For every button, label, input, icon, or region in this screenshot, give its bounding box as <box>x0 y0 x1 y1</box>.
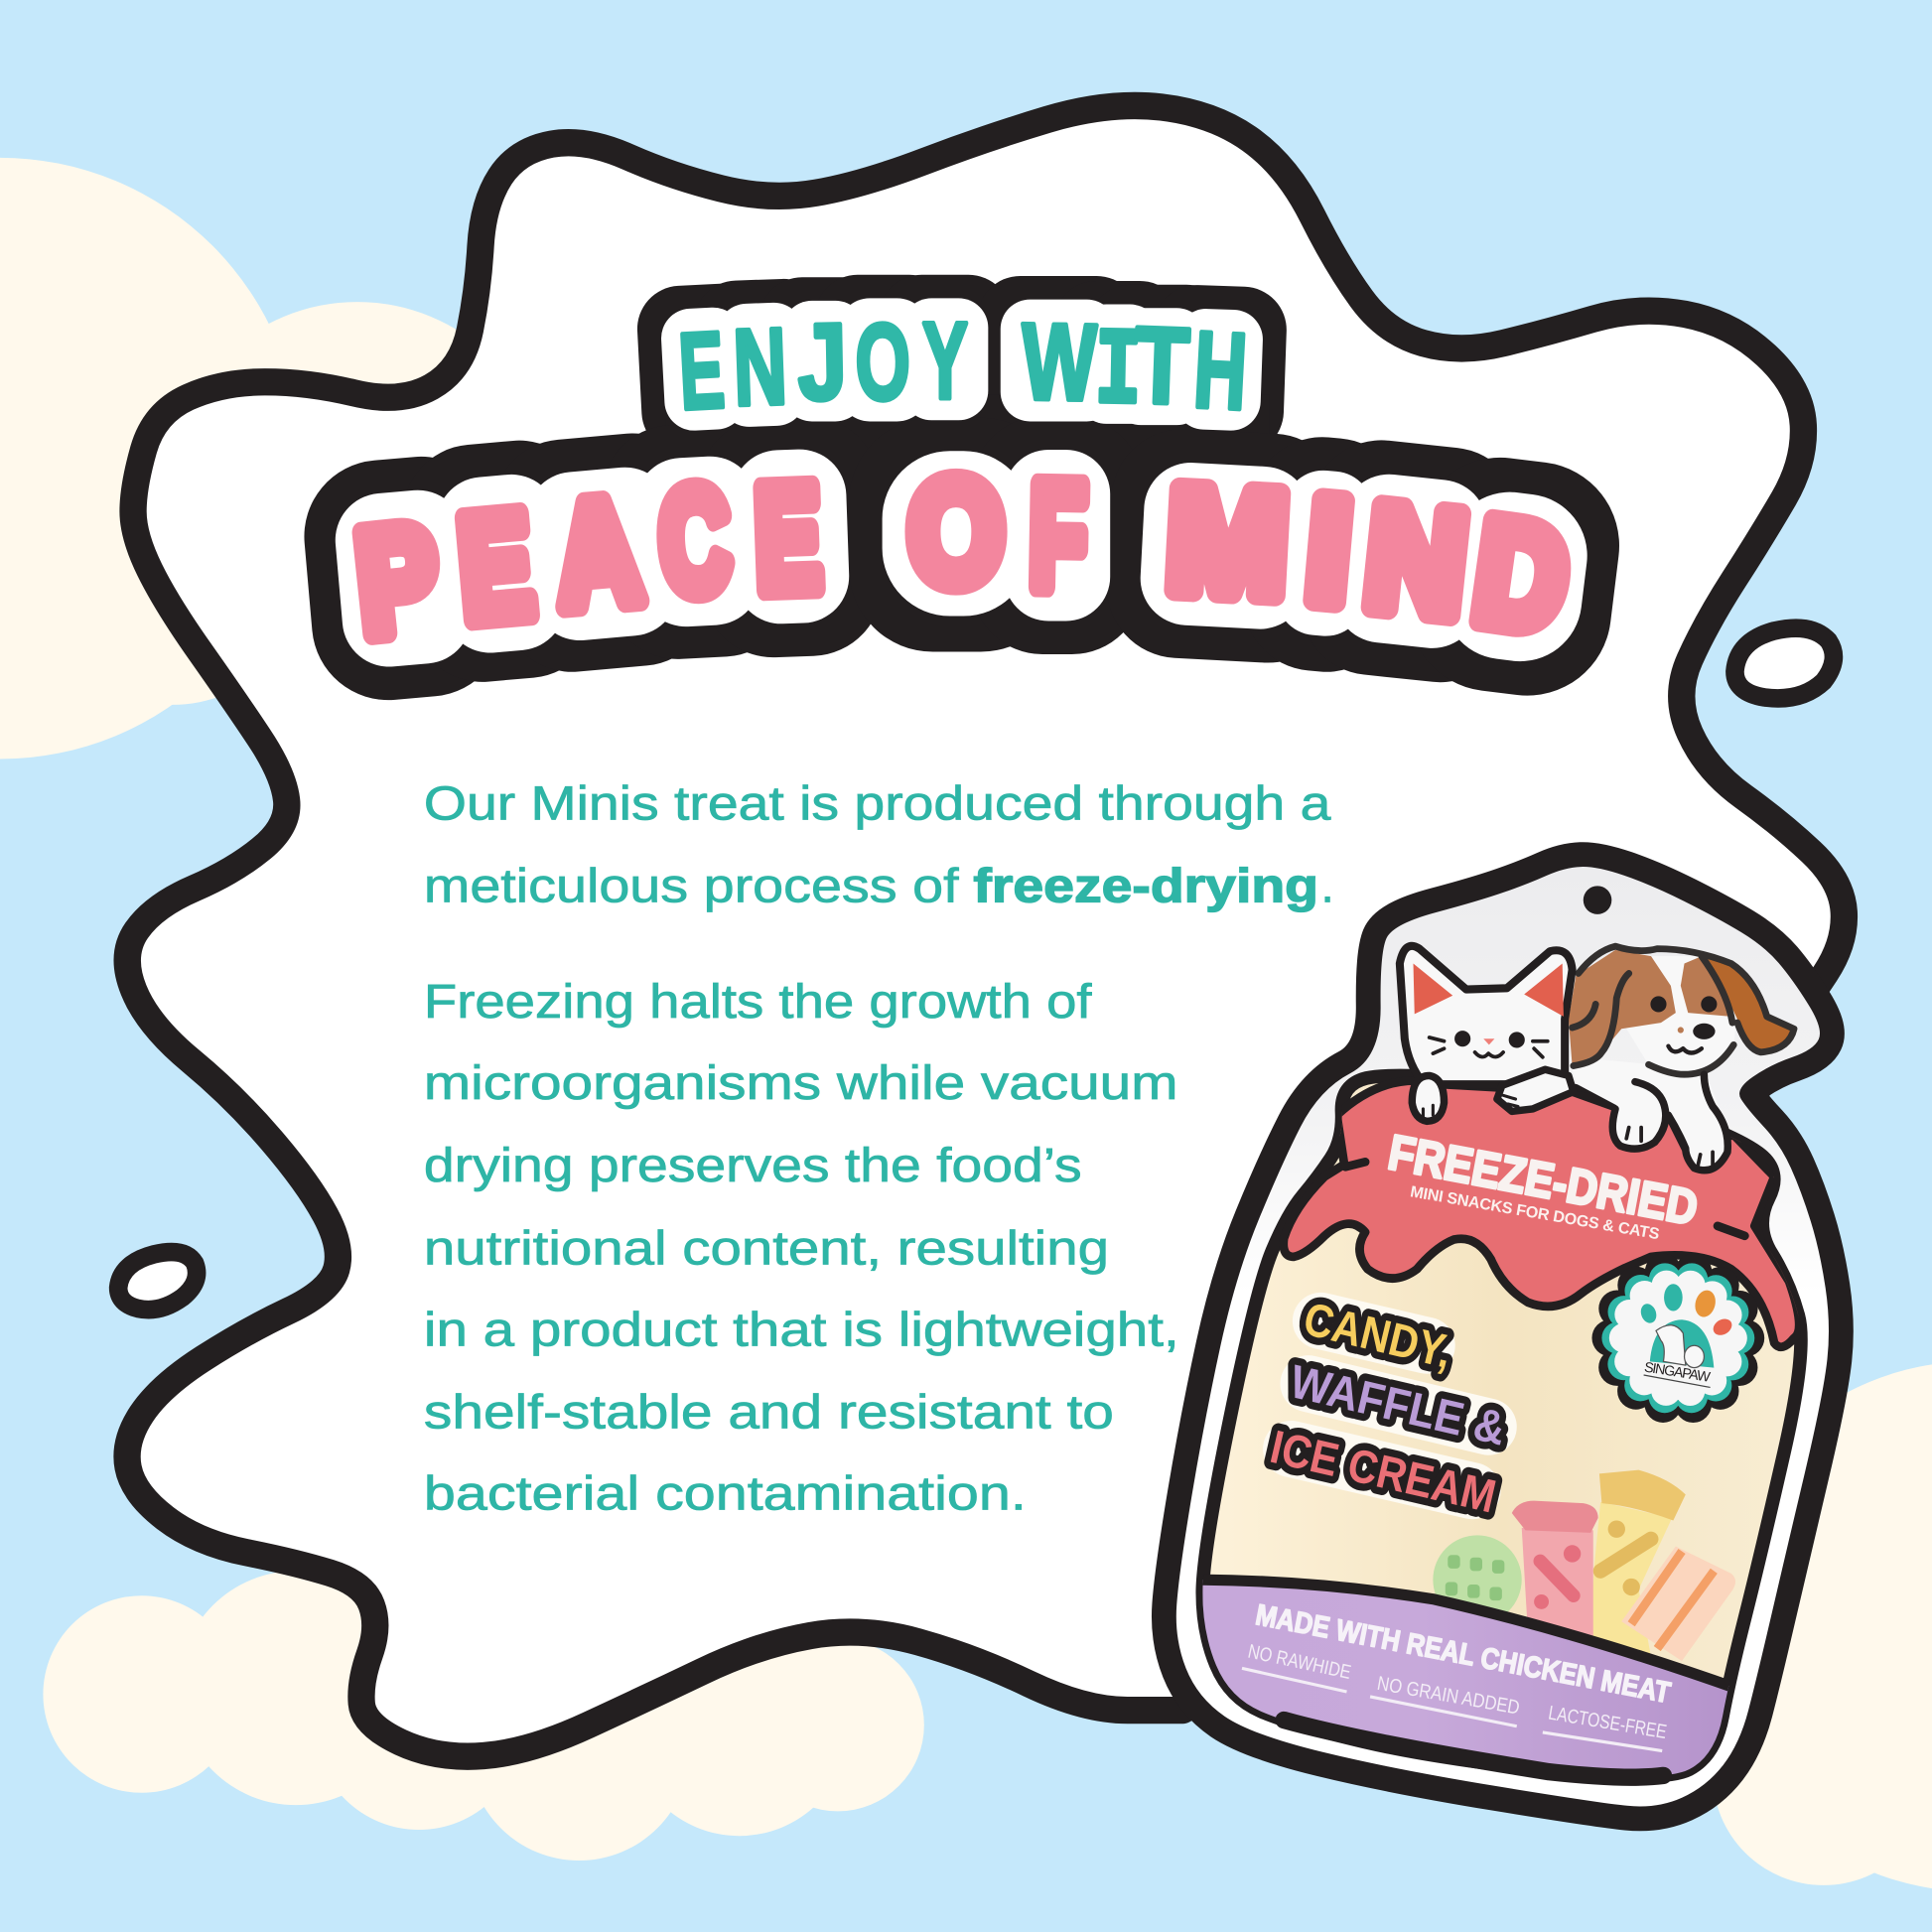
dog eyes and nose <box>1650 996 1717 1039</box>
treat: green waffle <box>1433 1535 1522 1612</box>
paragraph two: in a product that is lightweight, <box>424 1303 1179 1356</box>
heading: peace of mind: M <box>1164 457 1292 628</box>
hang hole <box>1584 886 1611 914</box>
dog right ear <box>1702 956 1794 1052</box>
white speech blob panel <box>127 105 1844 1756</box>
jar body <box>1202 1075 1801 1776</box>
dog right patch <box>1681 956 1731 1017</box>
paragraph two: microorganisms while vacuum <box>424 1056 1177 1110</box>
red lid <box>1284 1080 1799 1347</box>
heading: enjoy with <box>676 301 1250 435</box>
peace of mind black backing <box>298 413 1629 707</box>
paragraph one <box>424 776 1334 912</box>
cat nose <box>1483 1038 1494 1044</box>
treat: pink bar <box>1512 1501 1598 1651</box>
paragraph one: meticulous process of <box>424 859 959 912</box>
badge pet art <box>1650 1319 1714 1368</box>
small bubble: right <box>1734 628 1834 698</box>
cat right paw <box>1497 1069 1574 1111</box>
dog mouth <box>1668 1046 1702 1052</box>
cat ears <box>1414 964 1452 1014</box>
flavor sticker: ice cream: ICE CREAM <box>1266 1420 1501 1523</box>
paragraph two: drying preserves the food’s <box>424 1139 1082 1192</box>
heading: peace of mind: N <box>1358 474 1473 648</box>
paragraph two: Freezing halts the growth of <box>424 975 1092 1029</box>
heading: enjoy with: J <box>797 302 848 424</box>
small bubble: left <box>118 1252 197 1310</box>
heading: peace of mind: C <box>655 456 734 625</box>
product pouch <box>1171 867 1829 1849</box>
paragraph two: shelf-stable and resistant to <box>424 1385 1114 1439</box>
treat: orange popsicle <box>1621 1547 1735 1661</box>
label: no rawhide: NO RAWHIDE <box>1246 1641 1353 1684</box>
dog head <box>1626 956 1737 1074</box>
paragraph one: freeze-drying <box>973 859 1318 912</box>
lid subheading: MINI SNACKS FOR DOGS & CATS <box>1409 1182 1661 1243</box>
cat left paw <box>1412 1075 1445 1121</box>
jar bottom edge <box>1284 1721 1663 1777</box>
lid heading: FREEZE-DRIED <box>1384 1124 1702 1236</box>
heading: peace of mind: A <box>549 468 646 639</box>
body text <box>424 776 1334 1520</box>
peace of mind white backing <box>332 448 1594 670</box>
heading: enjoy with: T <box>1133 306 1191 428</box>
enjoy with black backing <box>635 275 1288 469</box>
paragraph one: Our Minis treat is produced through a <box>424 776 1330 830</box>
heading: peace of mind: D <box>1465 487 1578 664</box>
paragraph two: nutritional content, resulting <box>424 1221 1109 1275</box>
cloud: bottom right <box>1707 1361 1932 1891</box>
cloud: bottom left <box>43 1571 924 1861</box>
cloud: top left <box>0 158 548 759</box>
heading: peace of mind: O <box>909 450 1004 615</box>
cat mouth and whiskers <box>1430 1037 1548 1057</box>
badge: singapaw <box>1610 1271 1746 1406</box>
badge name: SINGAPAW <box>1643 1359 1712 1386</box>
lid stub lines <box>1345 1162 1744 1236</box>
cat mascot <box>1400 946 1574 1121</box>
heading: enjoy with: E <box>676 310 727 433</box>
dog left patch <box>1569 950 1676 1066</box>
heading: enjoy with: O <box>855 301 911 423</box>
heading: peace of mind: E <box>753 455 823 621</box>
heading: peace of mind <box>349 450 1578 666</box>
heading: peace of mind: E <box>453 481 539 652</box>
dog mascot <box>1569 946 1794 1171</box>
jar contents <box>1202 1082 1799 1775</box>
paragraph one: . <box>1320 859 1334 912</box>
label: made with real chicken meat: MADE WITH REAL CHICKEN MEAT <box>1253 1598 1673 1710</box>
heading: peace of mind: I <box>1302 466 1357 634</box>
cat eyes <box>1454 1031 1525 1048</box>
heading: peace of mind: F <box>1029 454 1087 620</box>
heading: enjoy with: Y <box>922 301 968 422</box>
pouch outline <box>1176 867 1829 1806</box>
paragraph two: bacterial contamination. <box>424 1466 1027 1520</box>
enjoy with white backing <box>660 298 1264 432</box>
title lockup <box>298 275 1629 707</box>
cat head <box>1400 946 1573 1084</box>
badge paw toes <box>1638 1284 1734 1338</box>
heading: enjoy with: N <box>732 305 789 428</box>
heading: enjoy with: I <box>1093 312 1143 435</box>
heading: enjoy with: W <box>1021 301 1098 424</box>
dog body <box>1571 1059 1727 1171</box>
purple label band <box>1202 1575 1729 1775</box>
dog outlines <box>1573 946 1794 1074</box>
treat: yellow bar <box>1589 1470 1686 1657</box>
flavor sticker: waffle: WAFFLE & <box>1286 1354 1511 1455</box>
label: no grain added: NO GRAIN ADDED <box>1375 1673 1521 1720</box>
heading: enjoy with: H <box>1191 309 1250 433</box>
heading: peace of mind: P <box>349 493 446 666</box>
flavor sticker: candy: CANDY, <box>1299 1292 1457 1378</box>
label: lactose-free: LACTOSE-FREE <box>1547 1703 1668 1743</box>
paragraph two <box>424 975 1179 1520</box>
dog legs <box>1612 1074 1727 1171</box>
